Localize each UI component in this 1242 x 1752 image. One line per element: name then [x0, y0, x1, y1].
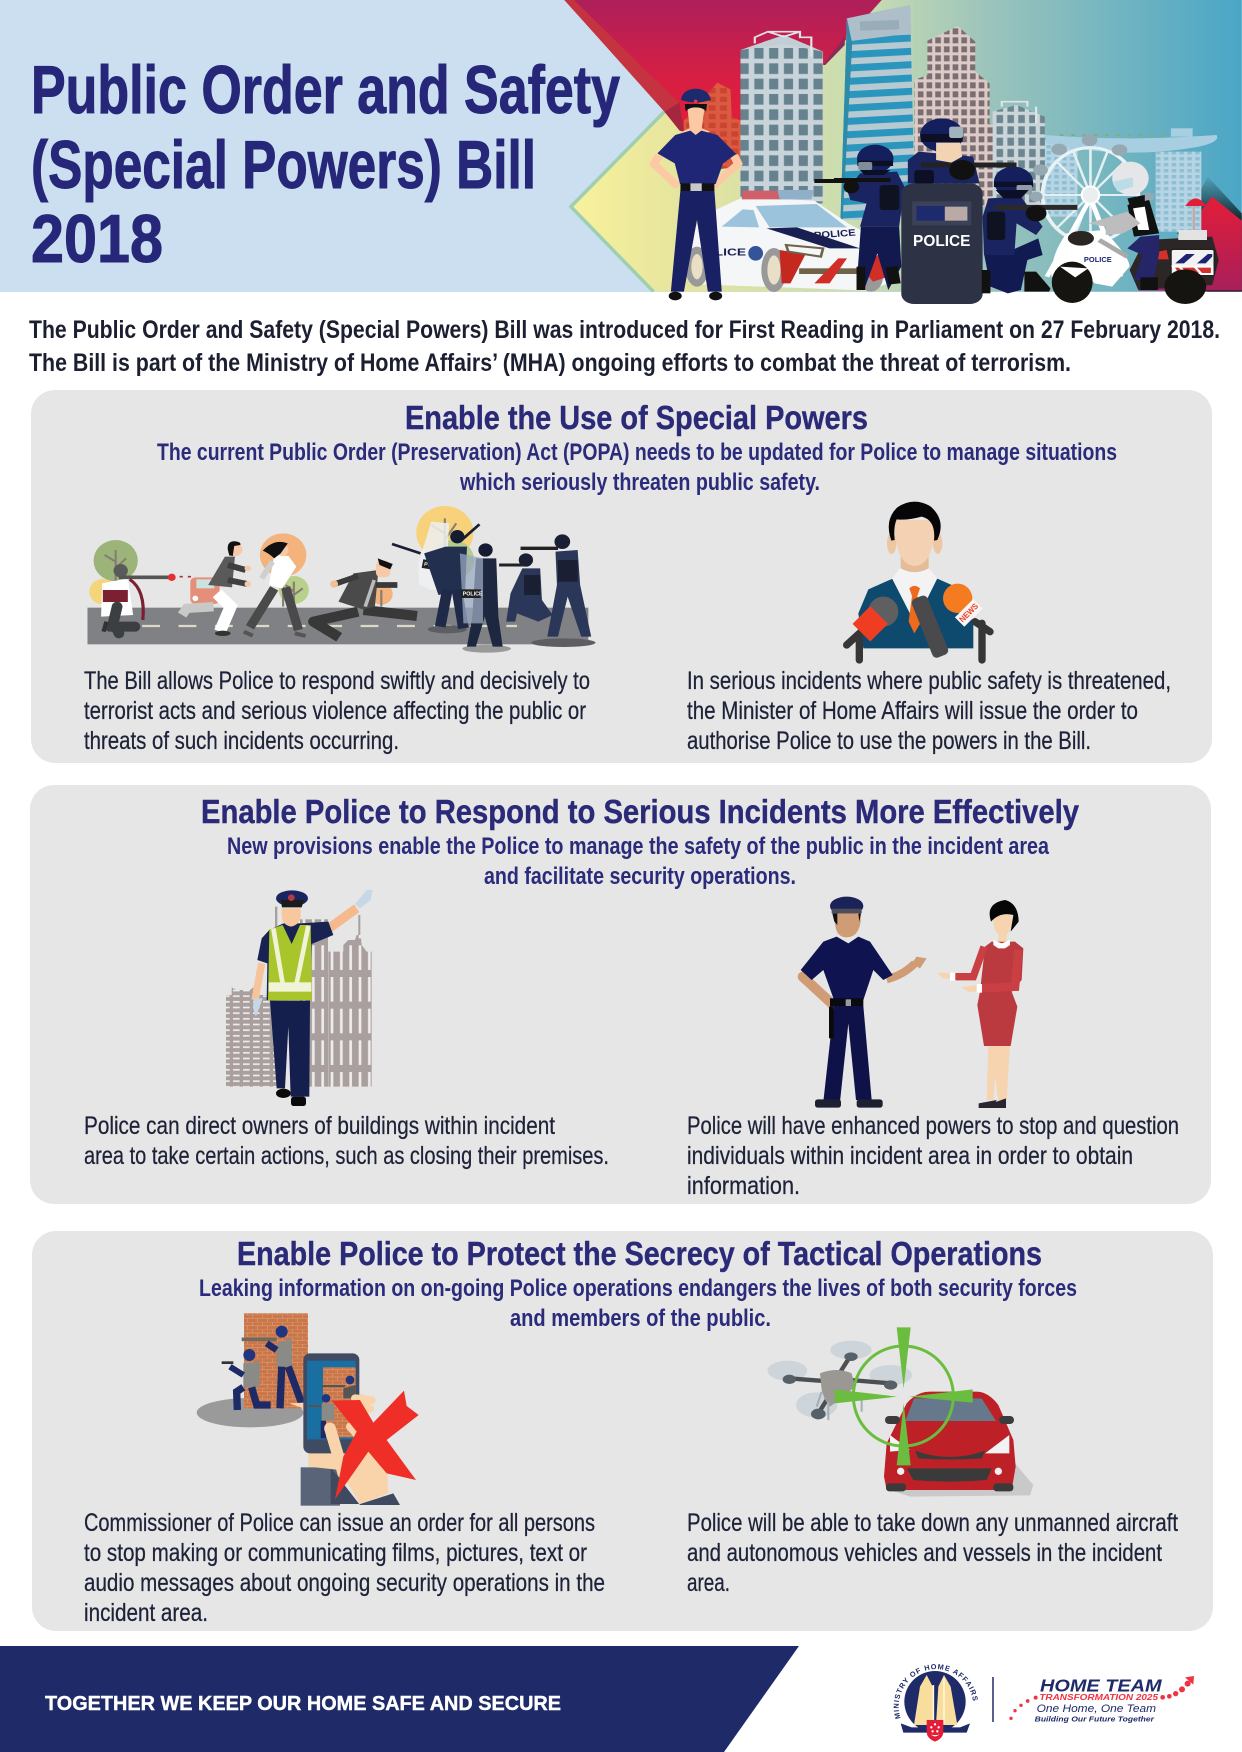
panel 3 left body text: [84, 1509, 605, 1627]
title: 2018: [31, 201, 163, 277]
illustration: phone filming officers crossed out: [197, 1313, 419, 1506]
panel 2 heading: Enable Police to Respond to Serious Incidents More Effectively: [201, 793, 1080, 830]
blue glass tower: [840, 5, 915, 220]
footer tagline: TOGETHER WE KEEP OUR HOME SAFE AND SECURE: [45, 1693, 561, 1715]
riot shield with officer: [901, 118, 1017, 304]
marina bay sands: [1045, 128, 1217, 232]
panel 2 left body text: [84, 1112, 609, 1170]
panel 3 left body text: to stop making or communicating films, pictures, text or: [84, 1539, 587, 1567]
panel 1 left body text: terrorist acts and serious violence affecting the public or: [84, 697, 586, 725]
panel 1 left body text: threats of such incidents occurring.: [84, 727, 399, 755]
riot shield with officer: POLICE: [913, 231, 970, 249]
panel 3 left body text: incident area.: [84, 1599, 208, 1627]
panel 2 left body text: Police can direct owners of buildings within incident: [84, 1112, 555, 1140]
police car: POLICE: [813, 228, 856, 241]
grey right tower: [993, 102, 1045, 207]
panel 1 right body text: the Minister of Home Affairs will issue the order to: [687, 697, 1138, 725]
pink tower: [914, 26, 997, 207]
attacker: [101, 564, 193, 633]
panel 2 subheading: [227, 833, 1049, 890]
red cross: [332, 1391, 419, 1499]
illustration: traffic police officer and buildings: [226, 890, 373, 1106]
riot police line: POLICE: [463, 591, 483, 597]
panel 2 right body text: information.: [687, 1172, 800, 1200]
panel 3 subheading: and members of the public.: [510, 1305, 771, 1332]
ferris wheel: [1030, 134, 1154, 277]
green crosshair: [835, 1327, 973, 1465]
panel 3 subheading: [199, 1275, 1077, 1332]
running man: [182, 541, 251, 636]
panel 3 right body text: area.: [687, 1569, 730, 1597]
header banner: [0, 0, 1242, 304]
logo: home team transformation 2025: TRANSFORMATION 2025: [1039, 1693, 1159, 1702]
illustration: minister at press microphones: [847, 502, 990, 660]
panel 1 right body text: [687, 667, 1171, 755]
panel 1 subheading: [157, 439, 1117, 496]
riot police line: POLICE: [424, 562, 445, 571]
panel 1 left body text: [84, 667, 590, 755]
riot police line: [392, 522, 591, 647]
intro text: The Bill is part of the Ministry of Home Affairs’ (MHA) ongoing efforts to combat the threat of terrorism.: [29, 349, 1071, 377]
police motorcycle: [1051, 162, 1219, 304]
panel 2 right body text: individuals within incident area in order to obtain: [687, 1142, 1133, 1170]
riot police left: [814, 145, 904, 290]
logo: home team transformation 2025: HOME TEAM: [1040, 1675, 1162, 1695]
header background shapes: [564, 0, 1242, 304]
panel 3 left body text: audio messages about ongoing security operations in the: [84, 1569, 605, 1597]
panel 1 right body text: authorise Police to use the powers in the Bill.: [687, 727, 1091, 755]
running suited man: [313, 558, 417, 637]
police car: [685, 190, 888, 292]
police car: POLICE: [695, 247, 746, 258]
drone: [767, 1341, 912, 1420]
illustration: drone and car in crosshair: [767, 1327, 1033, 1497]
pink car: [190, 577, 220, 604]
riot police kneeling: [982, 167, 1077, 293]
officers: [222, 1326, 302, 1410]
police motorcycle: POLICE: [1084, 256, 1112, 264]
panel: enable the use of special powers: [31, 390, 1212, 763]
red car: [884, 1392, 1033, 1497]
illustration: police officer questioning woman: [801, 897, 1023, 1108]
title: [31, 52, 620, 277]
panel 1 left body text: The Bill allows Police to respond swiftly and decisively to: [84, 667, 590, 695]
panel 3 heading: Enable Police to Protect the Secrecy of Tactical Operations: [237, 1235, 1042, 1272]
intro text: [29, 316, 1220, 377]
logo: ministry of home affairs crest: MINISTRY OF HOME AFFAIRS: [894, 1664, 978, 1719]
panel 2 right body text: [687, 1112, 1179, 1200]
police officer: [654, 89, 738, 300]
footer banner: [0, 1646, 799, 1752]
illustration: civilians fleeing attacker towards riot police: [87, 506, 596, 653]
panel: protect secrecy of tactical operations: [32, 1231, 1213, 1631]
logo: home team transformation 2025: Building Our Future Together: [1035, 1715, 1155, 1724]
logo: home team transformation 2025: One Home, One Team: [1037, 1703, 1156, 1715]
title: (Special Powers) Bill: [31, 127, 536, 203]
hand and phone: [289, 1353, 400, 1506]
grey tower: [740, 32, 823, 203]
panel 3 left body text: Commissioner of Police can issue an order for all persons: [84, 1509, 595, 1537]
panel 2 left body text: area to take certain actions, such as closing their premises.: [84, 1142, 609, 1170]
panel 3 right body text: [687, 1509, 1178, 1597]
panel: respond to serious incidents: [30, 785, 1211, 1204]
red building: [684, 83, 740, 173]
logo: ministry of home affairs crest: [894, 1664, 978, 1742]
panel 1 heading: Enable the Use of Special Powers: [405, 399, 868, 436]
title: Public Order and Safety: [31, 52, 620, 128]
illustration: minister at press microphones: NEWS: [957, 601, 980, 624]
panel 2 subheading: and facilitate security operations.: [484, 863, 796, 890]
panel 2 subheading: New provisions enable the Police to manage the safety of the public in the incident area: [227, 833, 1049, 860]
logo: home team transformation 2025: [1009, 1675, 1194, 1724]
running woman: [244, 542, 306, 636]
logo divider: [992, 1677, 994, 1722]
panel 1 subheading: which seriously threaten public safety.: [459, 469, 820, 496]
